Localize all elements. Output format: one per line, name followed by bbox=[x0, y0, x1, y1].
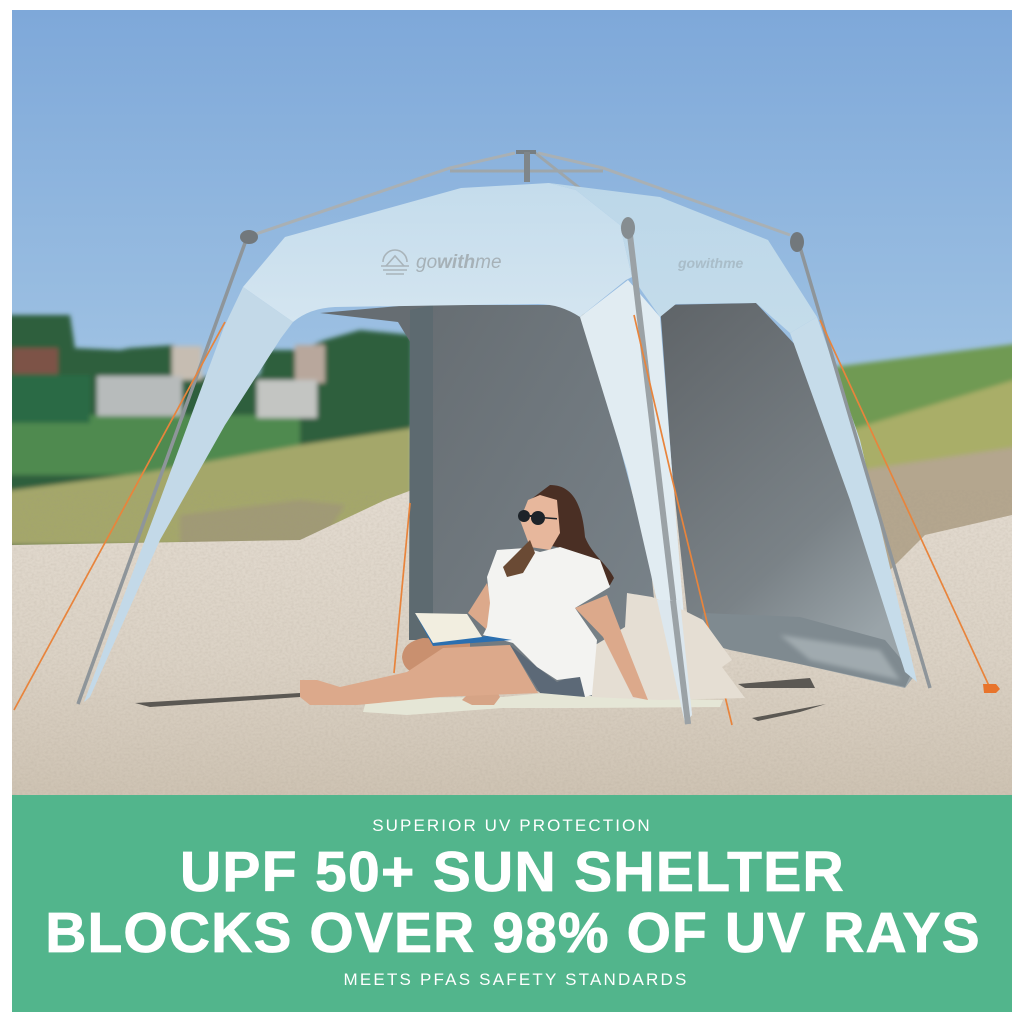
background hills and trees bbox=[12, 311, 1012, 570]
face bbox=[520, 495, 560, 550]
headline line 1: UPF 50+ SUN SHELTER bbox=[180, 840, 845, 904]
far foot bbox=[462, 688, 500, 705]
shorts bbox=[510, 645, 585, 697]
poles bbox=[78, 243, 930, 704]
corner joints bbox=[240, 230, 258, 244]
pillow and tote bbox=[592, 593, 745, 700]
logo wordmark: gowithme bbox=[416, 252, 502, 273]
hair lock over shirt bbox=[503, 540, 535, 577]
shadows on sand bbox=[135, 678, 826, 721]
hair bbox=[530, 485, 614, 585]
roof frame poles and hub bbox=[250, 152, 790, 236]
buildings bbox=[172, 346, 202, 380]
centre pole bbox=[630, 235, 688, 724]
roof front panel bbox=[243, 183, 632, 322]
photo: beach scene bbox=[0, 10, 1024, 795]
near leg bbox=[300, 645, 538, 705]
right dune bbox=[826, 342, 1024, 530]
rear gray under arch bbox=[320, 305, 440, 345]
book bbox=[415, 613, 512, 646]
sunglasses bbox=[518, 510, 557, 525]
logo icon bbox=[381, 250, 409, 274]
right leg panel bbox=[790, 317, 917, 682]
left leg panel bbox=[84, 287, 293, 702]
shirt bbox=[483, 547, 610, 697]
centre panel over tote bbox=[657, 600, 692, 724]
rear wall left seam bbox=[409, 305, 433, 640]
banner bbox=[12, 795, 1012, 1012]
orange guy lines bbox=[14, 315, 990, 725]
right wall silver band bbox=[696, 613, 912, 687]
rear wall bbox=[432, 305, 665, 705]
sky bbox=[12, 10, 1012, 490]
arm right bbox=[575, 595, 648, 700]
shelter bbox=[14, 152, 990, 725]
headline line 2: BLOCKS OVER 98% OF UV RAYS bbox=[45, 901, 981, 965]
footnote text: MEETS PFAS SAFETY STANDARDS bbox=[344, 970, 688, 989]
far knee bbox=[402, 638, 470, 672]
eyebrow text: SUPERIOR UV PROTECTION bbox=[372, 816, 652, 835]
woman bbox=[300, 485, 648, 705]
sand bbox=[12, 490, 1012, 795]
centre leg panel bbox=[580, 280, 692, 723]
right wall bbox=[660, 303, 915, 688]
left dune grass bbox=[0, 428, 412, 545]
brand logo side: gowithme bbox=[677, 255, 744, 271]
brand logo front bbox=[381, 250, 502, 274]
stake bbox=[983, 684, 1000, 693]
roof right panel bbox=[549, 183, 817, 333]
blanket bbox=[363, 693, 723, 715]
arm left bbox=[468, 583, 493, 630]
